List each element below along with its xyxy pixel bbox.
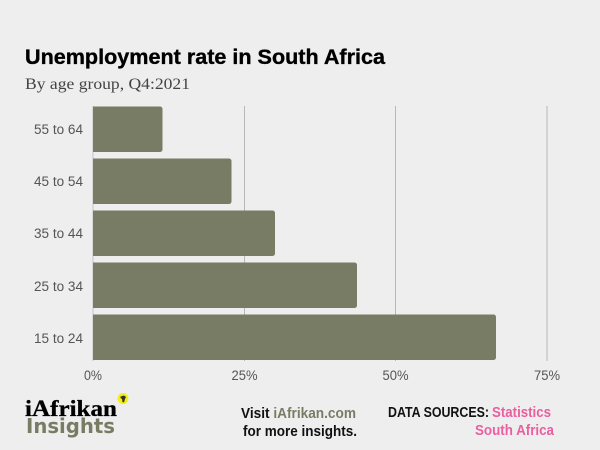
call to action: for more insights.: [243, 424, 357, 440]
axis labels: 25%: [232, 368, 258, 383]
bar: 45 to 54: [93, 158, 232, 204]
call to action: [241, 406, 357, 440]
axis labels: 0%: [84, 368, 102, 383]
logo: iAfrikan Insights: iAfrikan: [25, 396, 117, 421]
bar: 15 to 24: [93, 314, 496, 360]
category labels: 55 to 64: [34, 122, 83, 137]
category labels: 25 to 34: [34, 279, 83, 294]
title: Unemployment rate in South Africa: [25, 46, 385, 69]
logo: iAfrikan Insights: [25, 393, 128, 438]
category labels: 35 to 44: [34, 226, 83, 241]
call to action: Visit iAfrikan.com: [241, 406, 356, 422]
bar: 25 to 34: [93, 262, 357, 308]
subtitle: By age group, Q4:2021: [25, 76, 190, 93]
data sources: South Africa: [475, 423, 555, 439]
data sources: [388, 405, 555, 439]
category labels: [34, 122, 83, 346]
icon: yellow Africa badge: [118, 393, 128, 404]
bar: 55 to 64: [93, 106, 162, 152]
category labels: 15 to 24: [34, 331, 83, 346]
axis labels: [84, 368, 560, 383]
logo: iAfrikan Insights: Insights: [26, 414, 115, 438]
axis labels: 75%: [534, 368, 560, 383]
data sources: DATA SOURCES:: [388, 405, 489, 421]
data sources: Statistics: [492, 405, 551, 421]
bar chart: [34, 106, 560, 383]
axis labels: 50%: [382, 368, 408, 383]
category labels: 45 to 54: [34, 174, 83, 189]
bar: 35 to 44: [93, 210, 275, 256]
